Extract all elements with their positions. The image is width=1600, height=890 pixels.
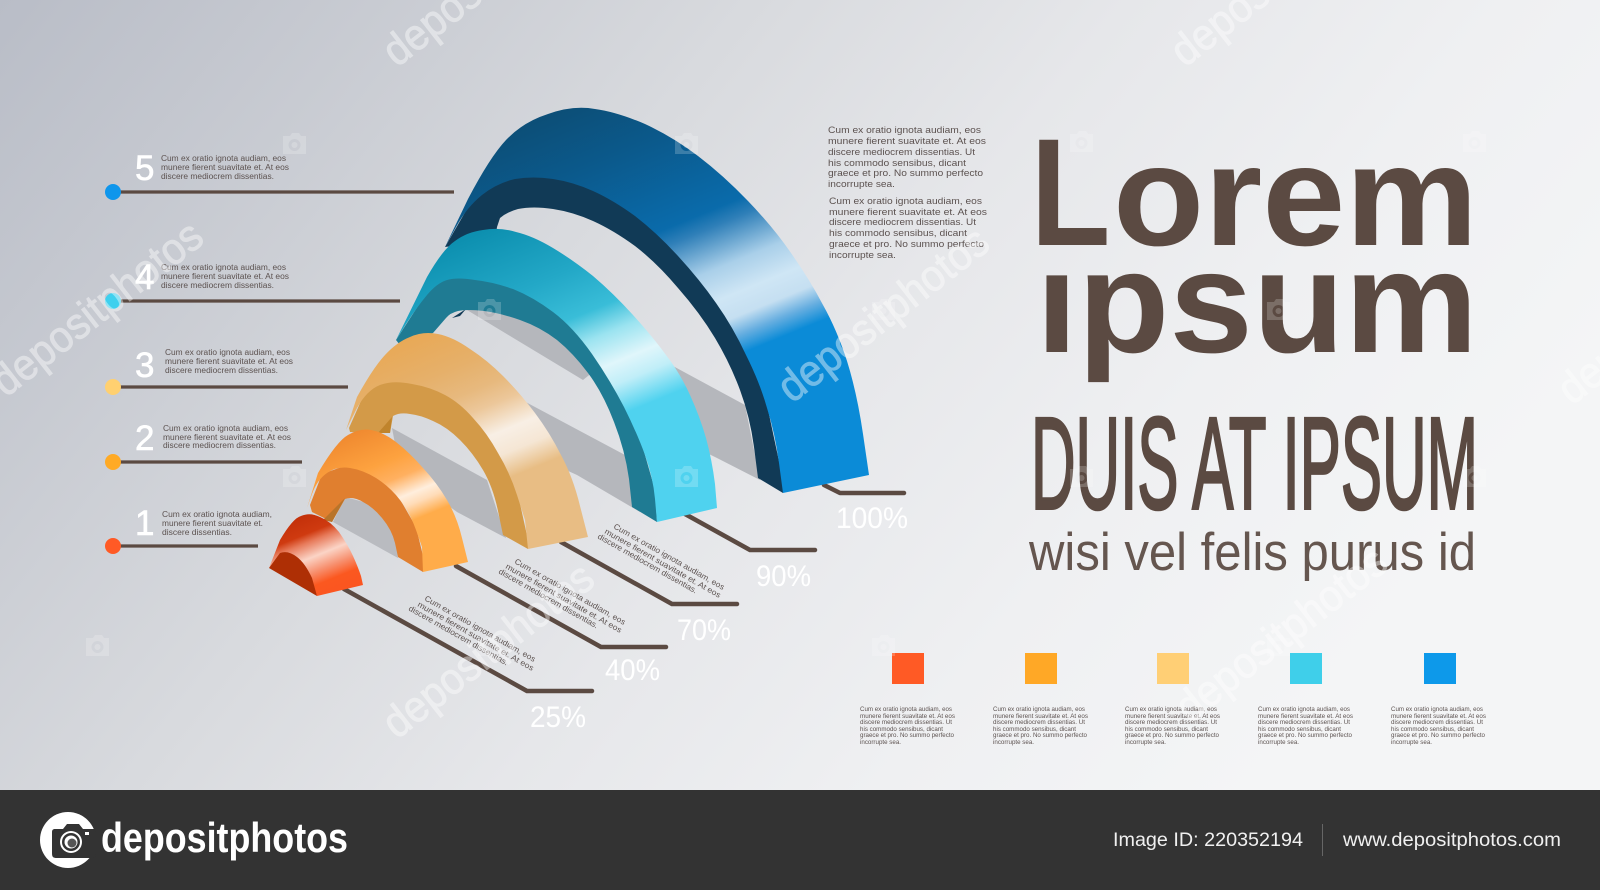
item 5 bbox=[105, 149, 454, 200]
item 1: Cum ex oratio ignota audiam, bbox=[162, 510, 272, 519]
percent labels: 100% bbox=[836, 502, 908, 535]
item 4 bbox=[105, 258, 400, 309]
website url: www.depositphotos.com bbox=[1342, 829, 1561, 851]
item 3: 3 bbox=[135, 346, 154, 385]
isometric text block: 25%: Cum ex oratio ignota audiam, eos bbox=[423, 594, 537, 664]
legend item 1: incorrupte sea. bbox=[860, 740, 901, 746]
item 5: discere mediocrem dissentias. bbox=[161, 172, 274, 181]
legend item 5: munere fierent suavitate et. At eos bbox=[1391, 714, 1486, 720]
shadow: teal arch bbox=[467, 300, 640, 512]
item 4: discere mediocrem dissentias. bbox=[161, 281, 274, 290]
watermark overlay: depositphotos bbox=[768, 217, 998, 412]
text block: top centre paragraph 2: incorrupte sea. bbox=[829, 250, 896, 261]
percent labels bbox=[530, 502, 908, 734]
legend item 4: his commodo sensibus, dicant bbox=[1258, 727, 1341, 733]
legend item 5: graece et pro. No summo perfecto bbox=[1391, 733, 1486, 739]
legend item 1: graece et pro. No summo perfecto bbox=[860, 733, 955, 739]
legend item 4 bbox=[1258, 653, 1353, 746]
legend item 5: discere mediocrem dissentias. Ut bbox=[1391, 720, 1483, 726]
text block: top centre paragraph 1: discere mediocrem dissentias. Ut bbox=[828, 147, 975, 158]
legend bbox=[860, 653, 1486, 746]
item 2: Cum ex oratio ignota audiam, eos bbox=[163, 424, 288, 433]
item 1: discere dissentias. bbox=[162, 528, 232, 537]
watermark overlay: depositphotos bbox=[1166, 537, 1396, 732]
title: ipsum bbox=[1036, 221, 1478, 383]
legend item 3: discere mediocrem dissentias. Ut bbox=[1125, 720, 1217, 726]
item 4: munere fierent suavitate et. At eos bbox=[161, 272, 289, 281]
item 2 bbox=[105, 419, 302, 470]
isometric text block: 25%: discere mediocrem dissentias. bbox=[407, 604, 510, 667]
legend item 2: incorrupte sea. bbox=[993, 740, 1034, 746]
legend item 4: munere fierent suavitate et. At eos bbox=[1258, 714, 1353, 720]
footer divider bbox=[1322, 824, 1324, 856]
arch: red 25% bbox=[269, 514, 363, 596]
legend item 5: Cum ex oratio ignota audiam, eos bbox=[1391, 707, 1483, 713]
legend item 3 bbox=[1125, 653, 1220, 746]
arch: tan 70% bbox=[346, 333, 588, 549]
watermark overlay: depositphotos bbox=[373, 553, 603, 748]
item 3: discere mediocrem dissentias. bbox=[165, 366, 278, 375]
legend item 4: Cum ex oratio ignota audiam, eos bbox=[1258, 707, 1350, 713]
shadow: tan arch bbox=[392, 428, 506, 538]
item 5: Cum ex oratio ignota audiam, eos bbox=[161, 154, 286, 163]
legend item 5 bbox=[1391, 653, 1486, 746]
text block: top centre paragraph 2: discere mediocrem dissentias. Ut bbox=[829, 217, 976, 228]
item 4: Cum ex oratio ignota audiam, eos bbox=[161, 263, 286, 272]
text block: top centre paragraph 1: his commodo sensibus, dicant bbox=[828, 158, 966, 169]
text block: top centre paragraph 1: Cum ex oratio ignota audiam, eos bbox=[828, 125, 981, 136]
image id: Image ID: 220352194 bbox=[1113, 829, 1303, 851]
shadow: blue arch bbox=[660, 359, 760, 480]
percent labels: 25% bbox=[530, 701, 586, 734]
text block: top centre paragraph 2: munere fierent suavitate et. At eos bbox=[829, 207, 987, 218]
isometric text block: 25%: munere fierent suavitate et. At eos bbox=[416, 600, 535, 673]
percent labels: 70% bbox=[677, 614, 731, 647]
item 5: 5 bbox=[135, 149, 154, 188]
text block: top centre paragraph 2: Cum ex oratio ignota audiam, eos bbox=[829, 196, 982, 207]
text block: top centre paragraph 1: incorrupte sea. bbox=[828, 179, 895, 190]
text block: top centre paragraph 1 bbox=[828, 125, 986, 190]
item 3 bbox=[105, 346, 348, 395]
legend item 1: Cum ex oratio ignota audiam, eos bbox=[860, 707, 952, 713]
footer logo bbox=[40, 812, 348, 868]
item 2: munere fierent suavitate et. At eos bbox=[163, 433, 291, 442]
isometric text block: 70%: Cum ex oratio ignota audiam, eos bbox=[612, 522, 726, 592]
legend item 3: incorrupte sea. bbox=[1125, 740, 1166, 746]
shadow: orange arch bbox=[333, 497, 398, 558]
legend item 1 bbox=[860, 653, 955, 746]
isometric text block: 40%: munere fierent suavitate et. At eos bbox=[504, 562, 623, 635]
title: L bbox=[1030, 107, 1110, 278]
legend item 2: Cum ex oratio ignota audiam, eos bbox=[993, 707, 1085, 713]
legend item 5: his commodo sensibus, dicant bbox=[1391, 727, 1474, 733]
legend item 4: discere mediocrem dissentias. Ut bbox=[1258, 720, 1350, 726]
legend item 4: graece et pro. No summo perfecto bbox=[1258, 733, 1353, 739]
percent labels: 90% bbox=[756, 560, 811, 593]
leader lines to percent labels bbox=[344, 485, 904, 691]
footer bar bbox=[0, 790, 1600, 890]
icon: camera badge bbox=[40, 812, 96, 868]
text block: top centre paragraph 2 bbox=[829, 196, 987, 261]
percent labels: 40% bbox=[605, 654, 660, 687]
legend item 2: discere mediocrem dissentias. Ut bbox=[993, 720, 1085, 726]
legend item 5: incorrupte sea. bbox=[1391, 740, 1432, 746]
item 2: 2 bbox=[135, 419, 154, 458]
isometric text block: 70%: munere fierent suavitate et. At eos bbox=[603, 527, 722, 600]
legend item 2 bbox=[993, 653, 1088, 746]
item 3: munere fierent suavitate et. At eos bbox=[165, 357, 293, 366]
arch: teal 90% bbox=[396, 229, 717, 522]
isometric text block: 40%: discere mediocrem dissentias. bbox=[497, 567, 600, 630]
item 2: discere mediocrem dissentias. bbox=[163, 441, 276, 450]
logo wordmark: depositphotos bbox=[101, 814, 348, 861]
tagline: wisi vel felis purus id bbox=[1028, 523, 1476, 582]
legend item 1: discere mediocrem dissentias. Ut bbox=[860, 720, 952, 726]
legend item 2: munere fierent suavitate et. At eos bbox=[993, 714, 1088, 720]
arch: blue 100% bbox=[445, 108, 869, 493]
legend item 1: his commodo sensibus, dicant bbox=[860, 727, 943, 733]
item 1: munere fierent suavitate et. bbox=[162, 519, 263, 528]
title bbox=[1039, 140, 1469, 382]
text block: top centre paragraph 1: munere fierent suavitate et. At eos bbox=[828, 136, 986, 147]
title: orem bbox=[1113, 117, 1478, 276]
item 4: 4 bbox=[135, 258, 154, 297]
item 1: 1 bbox=[135, 504, 154, 543]
legend item 2: graece et pro. No summo perfecto bbox=[993, 733, 1088, 739]
legend item 3: graece et pro. No summo perfecto bbox=[1125, 733, 1220, 739]
isometric text block: 70%: discere mediocrem dissentias. bbox=[596, 532, 699, 595]
arch: orange 40% bbox=[307, 430, 468, 572]
item 1 bbox=[105, 504, 272, 554]
legend item 3: Cum ex oratio ignota audiam, eos bbox=[1125, 707, 1217, 713]
legend item 2: his commodo sensibus, dicant bbox=[993, 727, 1076, 733]
item 5: munere fierent suavitate et. At eos bbox=[161, 163, 289, 172]
item 3: Cum ex oratio ignota audiam, eos bbox=[165, 348, 290, 357]
text block: top centre paragraph 1: graece et pro. No summo perfecto bbox=[828, 168, 983, 179]
text block: top centre paragraph 2: graece et pro. No summo perfecto bbox=[829, 239, 984, 250]
legend item 4: incorrupte sea. bbox=[1258, 740, 1299, 746]
legend item 3: his commodo sensibus, dicant bbox=[1125, 727, 1208, 733]
left numbered list bbox=[105, 149, 454, 554]
legend item 3: munere fierent suavitate et. At eos bbox=[1125, 714, 1220, 720]
isometric text block: 40%: Cum ex oratio ignota audiam, eos bbox=[513, 557, 627, 627]
legend item 1: munere fierent suavitate et. At eos bbox=[860, 714, 955, 720]
chart: isometric arches bbox=[269, 108, 869, 596]
text block: top centre paragraph 2: his commodo sensibus, dicant bbox=[829, 228, 967, 239]
